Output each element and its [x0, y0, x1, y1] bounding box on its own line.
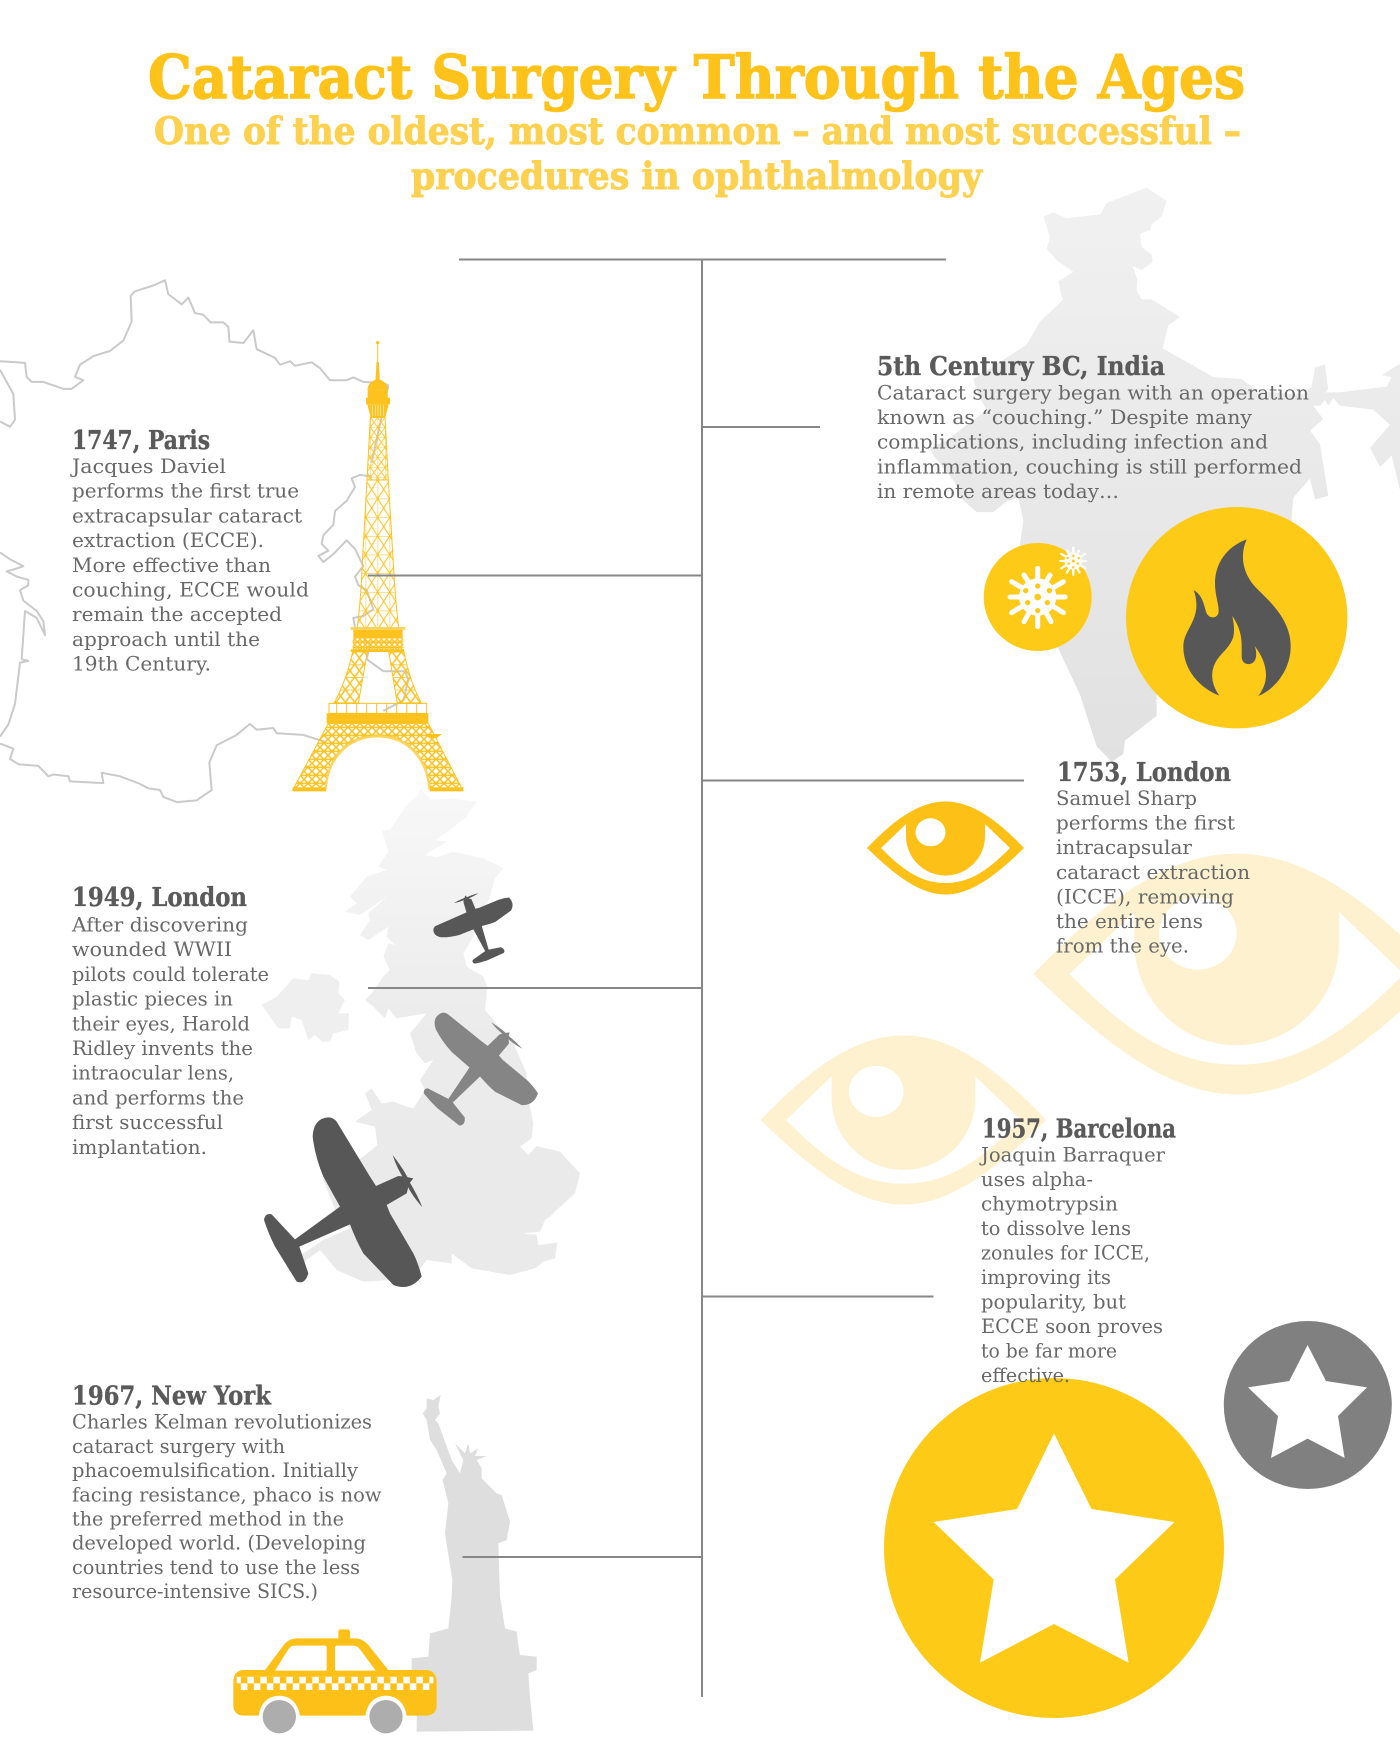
- text block: 1957, Barcelona: Joaquin Barraquer: [979, 1143, 1165, 1167]
- text block: 1967, New York: the preferred method in the: [72, 1506, 344, 1530]
- text block: 1957, Barcelona: chymotrypsin: [981, 1192, 1118, 1216]
- text block: 1957, Barcelona: uses alpha-: [981, 1167, 1093, 1191]
- icon: medium grey plane: [400, 991, 541, 1137]
- text block: 1949, London: wounded WWII: [72, 937, 232, 961]
- map: India: [930, 188, 1400, 762]
- text block: 1957, Barcelona: improving its: [981, 1265, 1111, 1289]
- text block: 1747, Paris: More effective than: [72, 553, 271, 577]
- text block: 1747, Paris: 19th Century.: [72, 652, 211, 676]
- text block: 1949, London: and performs the: [72, 1085, 244, 1109]
- subtitle: [154, 109, 1241, 198]
- icon: pale eye right: [1033, 854, 1400, 1094]
- icon: pale eye centre: [761, 1035, 1046, 1205]
- subtitle: procedures in ophthalmology: [411, 154, 983, 198]
- text block: 1747, Paris: extraction (ECCE).: [72, 528, 264, 552]
- text block: 1753, London: performs the first: [1056, 811, 1235, 835]
- text block: 1753, London: (ICCE), removing: [1056, 884, 1234, 908]
- text block: 1957, Barcelona: to dissolve lens: [981, 1216, 1131, 1240]
- text block: 1949, London: After discovering: [71, 912, 248, 936]
- text block: 1949, London: pilots could tolerate: [72, 962, 269, 986]
- title: Cataract Surgery Through the Ages: [148, 43, 1245, 113]
- text block: 1747, Paris: approach until the: [72, 627, 260, 651]
- text block: 5th Century BC, India: Cataract surgery began with an operation: [877, 380, 1309, 404]
- text block: 1967, New York: Charles Kelman revolutionizes: [72, 1410, 372, 1434]
- text block: 1949, London: implantation.: [72, 1135, 207, 1159]
- icon: small grey star circle: [1224, 1321, 1392, 1489]
- text block: 5th Century BC, India: [877, 352, 1309, 503]
- text block: 1967, New York: developed world. (Developing: [72, 1531, 366, 1555]
- text block: 1957, Barcelona: zonules for ICCE,: [981, 1241, 1150, 1265]
- text block: 1949, London: first successful: [72, 1110, 223, 1134]
- text block: 1753, London: the entire lens: [1056, 909, 1203, 933]
- icon: virus circle: [984, 543, 1092, 651]
- subtitle: One of the oldest, most common – and most successful –: [154, 109, 1241, 153]
- text block: 1753, London: cataract extraction: [1056, 860, 1250, 884]
- text block: 1949, London: intraocular lens,: [72, 1061, 234, 1085]
- icon: three aeroplanes: [264, 888, 541, 1287]
- text block: 1967, New York: phacoemulsification. Initially: [72, 1458, 359, 1482]
- text block: 5th Century BC, India: known as “couching.” Despite many: [877, 405, 1253, 429]
- text block: 1967, New York: [72, 1382, 382, 1603]
- icon: Statue of Liberty: [412, 1395, 537, 1732]
- text block: 1957, Barcelona: popularity, but: [981, 1290, 1126, 1314]
- icon: large star circle: [884, 1378, 1224, 1718]
- text block: 1967, New York: 1967, New York: [72, 1382, 272, 1412]
- icon: taxi: [233, 1629, 437, 1733]
- icon: Eiffel Tower: [293, 341, 463, 791]
- text block: 5th Century BC, India: in remote areas today…: [877, 479, 1119, 503]
- text block: 1949, London: 1949, London: [72, 883, 247, 913]
- text block: 5th Century BC, India: inflammation, couching is still performed: [877, 454, 1302, 478]
- text block: 1957, Barcelona: to be far more: [981, 1339, 1117, 1363]
- text block: 1949, London: their eyes, Harold: [72, 1011, 250, 1035]
- text block: 5th Century BC, India: complications, including infection and: [877, 430, 1268, 454]
- text block: 1747, Paris: Jacques Daviel: [70, 454, 226, 478]
- text block: 1753, London: [1056, 758, 1250, 958]
- text block: 1753, London: Samuel Sharp: [1056, 786, 1197, 810]
- text block: 1753, London: intracapsular: [1056, 835, 1192, 859]
- text block: 1967, New York: facing resistance, phaco is now: [72, 1482, 382, 1506]
- text block: 1967, New York: resource-intensive SICS.): [72, 1579, 318, 1603]
- icon: large dark plane: [264, 1117, 422, 1287]
- text block: 1747, Paris: remain the accepted: [72, 602, 282, 626]
- text block: 1747, Paris: extracapsular cataract: [72, 503, 302, 527]
- text block: 1747, Paris: couching, ECCE would: [72, 578, 309, 602]
- icon: small dark plane: [430, 888, 514, 968]
- text block: 1957, Barcelona: 1957, Barcelona: [982, 1115, 1176, 1145]
- text block: 1747, Paris: performs the first true: [72, 479, 299, 503]
- text block: 1747, Paris: [70, 426, 309, 676]
- text block: 1957, Barcelona: ECCE soon proves: [981, 1314, 1163, 1338]
- text block: 1747, Paris: 1747, Paris: [72, 426, 210, 456]
- text block: 1949, London: Ridley invents the: [72, 1036, 253, 1060]
- text block: 1753, London: 1753, London: [1057, 758, 1231, 788]
- icon: fire circle: [1126, 507, 1347, 728]
- timeline spine and branches: [368, 259, 1024, 1697]
- text block: 1949, London: plastic pieces in: [72, 987, 233, 1011]
- text block: 1949, London: [71, 883, 269, 1159]
- text block: 1753, London: from the eye.: [1056, 934, 1189, 958]
- text block: 1967, New York: countries tend to use the less: [72, 1555, 360, 1579]
- text block: 1967, New York: cataract surgery with: [72, 1434, 285, 1458]
- map: United Kingdom and Ireland: [262, 788, 580, 1282]
- icon: small yellow eye: [867, 802, 1024, 894]
- map: France outline: [0, 280, 408, 802]
- text block: 5th Century BC, India: 5th Century BC, India: [877, 352, 1165, 382]
- text block: 1957, Barcelona: [979, 1115, 1176, 1387]
- text block: 1957, Barcelona: effective.: [981, 1363, 1070, 1387]
